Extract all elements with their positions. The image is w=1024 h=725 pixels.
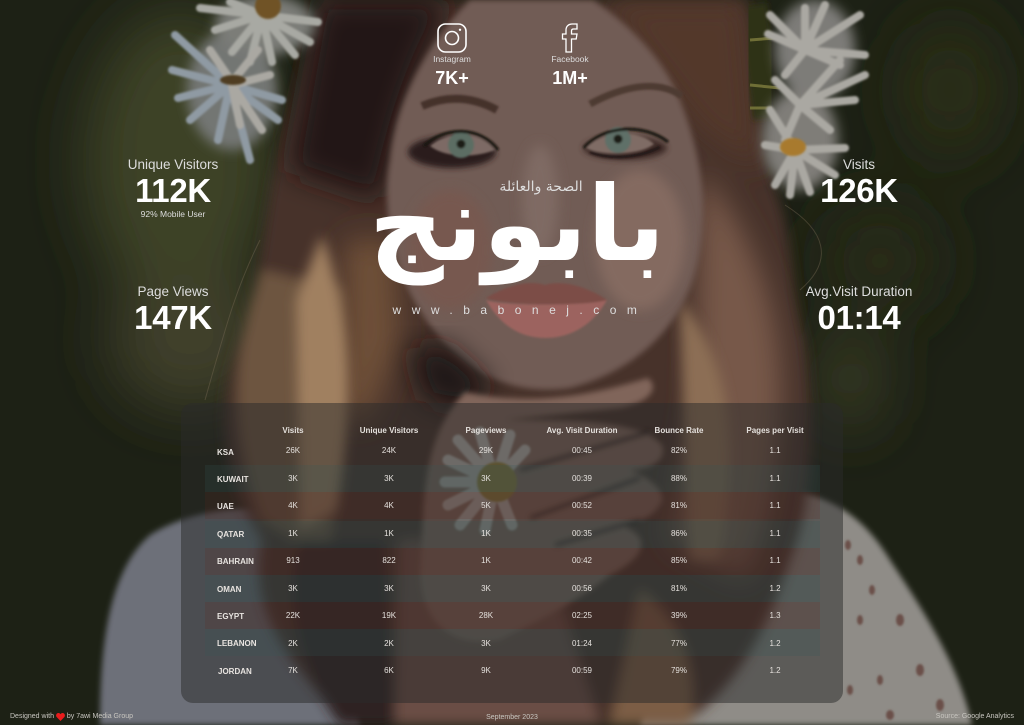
table header: Pageviews — [466, 426, 506, 435]
table text: 1.2 — [769, 639, 781, 648]
table text: 28K — [479, 611, 493, 620]
table text: 00:52 — [572, 501, 592, 510]
table text: LEBANON — [217, 639, 257, 648]
table text: 22K — [286, 611, 300, 620]
table text: 88% — [671, 474, 687, 483]
table panel — [181, 403, 843, 703]
stat: visits: 126K — [820, 172, 898, 208]
stat: average visit duration — [806, 284, 912, 336]
table text: 19K — [382, 611, 396, 620]
table header — [282, 426, 804, 435]
table text: 24K — [382, 446, 396, 455]
table text: 85% — [671, 556, 687, 565]
social: instagram — [433, 23, 471, 88]
social: instagram: 7K+ — [435, 68, 469, 88]
table text: 00:35 — [572, 529, 592, 538]
table text: 4K — [384, 501, 394, 510]
table text: KUWAIT — [217, 475, 249, 484]
table text: QATAR — [217, 530, 244, 539]
table text: 5K — [481, 501, 491, 510]
hand — [420, 378, 663, 642]
social: facebook — [551, 23, 589, 88]
table text: 1K — [288, 529, 298, 538]
table text: EGYPT — [217, 612, 244, 621]
table header: Visits — [282, 426, 304, 435]
stat: average visit duration: 01:14 — [818, 298, 900, 336]
blouse — [100, 490, 972, 725]
blouse eyelets — [845, 540, 944, 720]
table text: 7K — [288, 666, 298, 675]
stat: unique visitors: Unique Visitors — [128, 157, 218, 172]
table text: 1.2 — [769, 666, 781, 675]
table text: 00:39 — [572, 474, 592, 483]
footer: date: September 2023 — [486, 714, 538, 721]
table text: 6K — [384, 666, 394, 675]
table text: 29K — [479, 446, 493, 455]
table text: 1.1 — [769, 556, 781, 565]
face shading — [408, 145, 685, 310]
table text: 86% — [671, 529, 687, 538]
table text: 39% — [671, 611, 687, 620]
table text: 3K — [384, 474, 394, 483]
hair tones — [290, 0, 782, 580]
table text: 822 — [382, 556, 396, 565]
table text: 79% — [671, 666, 687, 675]
website url: www.babonej.com — [393, 303, 647, 317]
daisies in hair left — [172, 0, 318, 160]
table text: 00:59 — [572, 666, 592, 675]
table text: 00:45 — [572, 446, 592, 455]
table text: 1.1 — [769, 501, 781, 510]
table text: UAE — [217, 502, 234, 511]
table text: 1.3 — [769, 611, 781, 620]
lips — [486, 283, 607, 338]
table text: 3K — [481, 474, 491, 483]
table text: 00:56 — [572, 584, 592, 593]
table text: OMAN — [217, 585, 241, 594]
table text: 913 — [286, 556, 300, 565]
table text: 81% — [671, 501, 687, 510]
table text: 1.2 — [769, 584, 781, 593]
table text: 1K — [481, 529, 491, 538]
logo tagline: الصحة والعائلة — [499, 179, 583, 195]
table text: 81% — [671, 584, 687, 593]
stat: unique visitors: 112K — [135, 172, 211, 208]
icon: instagram — [437, 23, 467, 53]
table text: 3K — [288, 584, 298, 593]
table text: 1.1 — [769, 446, 781, 455]
table text: 02:25 — [572, 611, 592, 620]
logo wordmark: بابونج — [369, 163, 665, 285]
footer: credit: Designed with by 7awi Media Group — [10, 713, 133, 720]
table header: Pages per Visit — [746, 426, 804, 435]
table header: Avg. Visit Duration — [546, 426, 618, 435]
blond strands — [296, 235, 730, 560]
stat: page views: 147K — [134, 298, 212, 336]
table header: Bounce Rate — [655, 426, 703, 435]
social: facebook: Facebook — [551, 54, 589, 64]
eyes — [408, 86, 682, 168]
face — [387, 0, 703, 390]
hair — [224, 0, 811, 725]
table text: 1.1 — [769, 529, 781, 538]
table text: 4K — [288, 501, 298, 510]
daisies in hair right — [750, 0, 865, 195]
social: instagram: Instagram — [433, 54, 471, 64]
table text: 77% — [671, 639, 687, 648]
stat: unique visitors: 92% Mobile User — [141, 208, 205, 218]
icon: facebook — [562, 23, 578, 53]
table text: 2K — [384, 639, 394, 648]
table text: BAHRAIN — [217, 557, 254, 566]
table text: 1.1 — [769, 474, 781, 483]
stat: page views: Page Views — [137, 284, 209, 299]
stat: average visit duration: Avg.Visit Duration — [806, 284, 912, 299]
table text: 3K — [481, 584, 491, 593]
table text: 1K — [481, 556, 491, 565]
table text: 3K — [481, 639, 491, 648]
footer: source: Source: Google Analytics — [936, 713, 1014, 720]
neck shadow — [410, 345, 490, 410]
table text: 82% — [671, 446, 687, 455]
daisy on hand — [445, 432, 525, 530]
table text: 1K — [384, 529, 394, 538]
table text: 26K — [286, 446, 300, 455]
table text: 01:24 — [572, 639, 592, 648]
stat: visits: Visits — [843, 157, 875, 172]
table text: 00:42 — [572, 556, 592, 565]
table text: 2K — [288, 639, 298, 648]
social: facebook: 1M+ — [552, 68, 588, 88]
table text: 9K — [481, 666, 491, 675]
hair wisps — [205, 205, 821, 400]
table text: 3K — [288, 474, 298, 483]
table text: 3K — [384, 584, 394, 593]
table header: Unique Visitors — [360, 426, 418, 435]
table text: JORDAN — [218, 667, 252, 676]
stat: unique visitors — [128, 157, 218, 218]
table text: KSA — [217, 448, 234, 457]
